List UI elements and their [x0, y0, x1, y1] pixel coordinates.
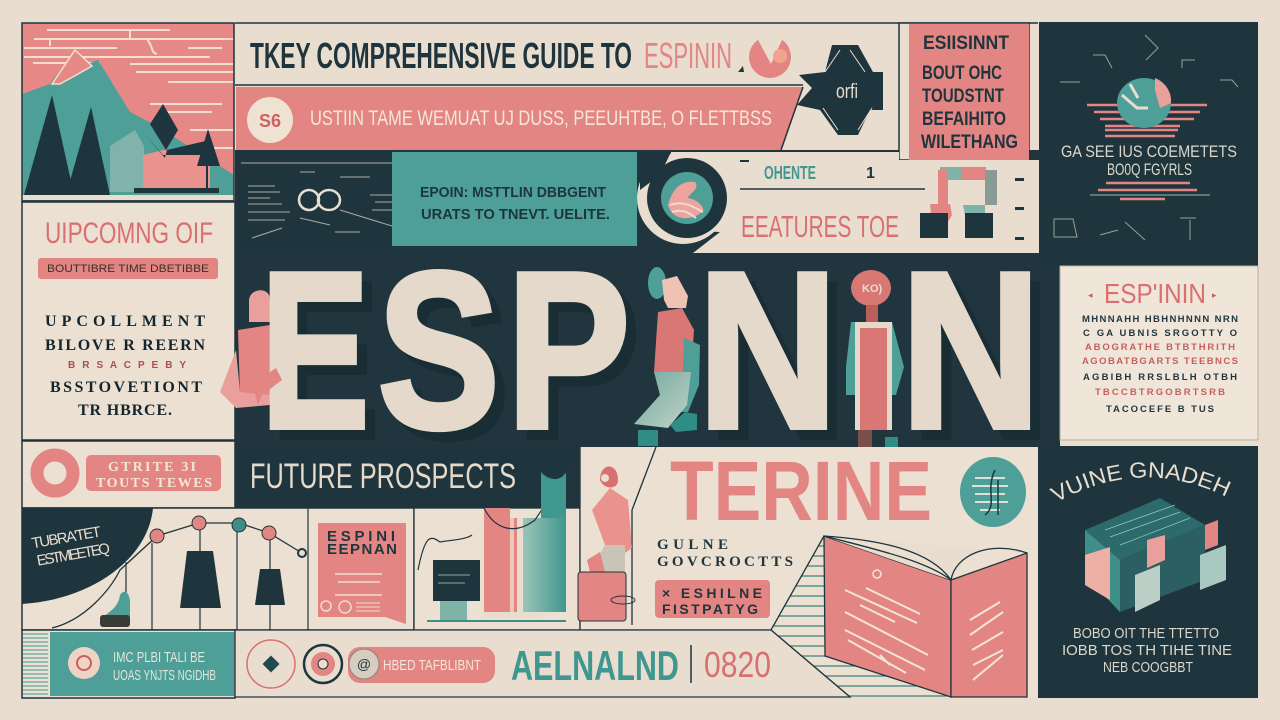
card: coral note: ESPINI [327, 528, 395, 545]
panel: right glossary: TACOCEFE B TUS [1106, 404, 1214, 415]
panel: teal footer note: IMC PLBI TALI BE [113, 649, 205, 666]
heading: giant ESPINNIN: P [507, 227, 630, 475]
panel: footer badges: AELNALND [511, 642, 679, 689]
figure: standing person [846, 270, 904, 448]
panel: circle badge note [22, 441, 235, 508]
panel: footer badges: @ [357, 656, 371, 672]
panel: subtitle ribbon [236, 87, 803, 150]
panel: upcoming: BILOVE R REERN [45, 337, 205, 354]
panel: subtitle ribbon: S6 [259, 111, 281, 131]
panel: coral note: TOUDSTNT [922, 86, 1004, 107]
figure: standing person: KO) [862, 283, 882, 295]
panel: timeline chart: ESTMEETEQ [36, 540, 111, 570]
heading: giant ESPINNIN: N [698, 227, 837, 475]
panel: circle badge note: GTRITE 3I [108, 460, 196, 475]
callout: coral tag [655, 580, 770, 618]
panel: features [637, 152, 1039, 253]
panel: right glossary: C GA UBNIS SRGOTTY O [1083, 328, 1237, 339]
panel: central dark banner [235, 150, 1060, 508]
panel: subtitle ribbon: USTIIN TAME WEMUAT UJ DUSS, PEEUHTBE, O FLETTBSS [310, 107, 772, 130]
panel: teal footer note [22, 630, 235, 698]
panel: coral note: BEFAIHITO [922, 109, 1006, 130]
panel: right glossary: ◂ [1088, 290, 1093, 300]
panel: features: EEATURES TOE [741, 209, 899, 244]
panel: coral note: BOUT OHC [922, 63, 1002, 84]
panel: right glossary [1060, 266, 1258, 440]
panel: upcoming: BSSTOVETIONT [50, 379, 202, 396]
heading: giant ESPINNIN: N [911, 237, 1050, 485]
panel: dark data cube: BOBO OIT THE TTETTO [1073, 625, 1219, 642]
panel: mountain landscape [22, 23, 234, 201]
panel: right glossary: AGOBATBGARTS TEEBNCS [1082, 356, 1238, 367]
panel: terine feature: GULNE [657, 537, 728, 553]
heading: future prospects: FUTURE PROSPECTS [250, 457, 516, 496]
panel: dark data cube [1038, 446, 1258, 698]
panel: upcoming: BOUTTIBRE TIME DBETIBBE [47, 263, 209, 275]
badge: dark hexagon: orfi [836, 81, 858, 103]
panel: dark data cube: IOBB TOS TH TIHE TINE [1062, 642, 1232, 659]
panel: teal caption: EPOIN: MSTTLIN DBBGENT [420, 184, 606, 201]
panel: terine feature [578, 444, 1038, 697]
panel: dark emblem: GA SEE IUS COEMETETS [1061, 142, 1237, 161]
card: coral note [318, 523, 406, 624]
panel: dark data cube: NEB COOGBBT [1103, 659, 1193, 676]
card: coral note: EEPNAN [327, 541, 397, 558]
panel: sketch strip [238, 151, 392, 248]
heading: giant ESPINNIN [261, 227, 1050, 485]
panel: features: 1 [866, 165, 875, 182]
heading: guide title: TKEY COMPREHENSIVE GUIDE TO [250, 35, 632, 76]
heading: giant ESPINNIN: N [901, 227, 1040, 475]
panel: dark emblem: BO0Q FGYRLS [1107, 160, 1192, 179]
figure: walking person [634, 267, 700, 446]
callout: coral tag: × ESHILNE [662, 585, 762, 601]
heading: giant ESPINNIN: E [261, 227, 369, 475]
panel: terine feature: TERINE [670, 444, 932, 538]
heading: guide title accent: ESPININ [644, 35, 732, 76]
panel: dark data cube: VUINE GNADEH [1049, 462, 1231, 500]
panel: footer badges [235, 630, 850, 697]
figure: sitting person hand [254, 368, 282, 405]
badge: dark hexagon [797, 45, 883, 135]
figure: sitting person body [220, 290, 270, 408]
heading: giant ESPINNIN: N [708, 237, 847, 485]
panel: features: OHENTE [764, 163, 816, 183]
panel: upcoming [22, 202, 235, 440]
panel: right glossary: ▸ [1212, 290, 1217, 300]
panel: teal caption: URATS TO TNEVT. UELITE. [421, 206, 610, 223]
panel frame: header [235, 23, 1038, 151]
panel: upcoming: B R S A C P E B Y [68, 360, 186, 371]
panel: upcoming: TR HBRCE. [78, 402, 172, 419]
heading: giant ESPINNIN: E [271, 237, 379, 485]
icon: open book [580, 536, 1027, 697]
panel: upcoming: UPCOLLMENT [45, 313, 205, 330]
panel: coral note: WILETHANG [921, 132, 1018, 153]
panel: teal footer note: UOAS YNJTS NGIDHB [113, 667, 216, 684]
heading: future prospects [235, 447, 575, 518]
panel: upcoming: UIPCOMNG OIF [45, 217, 213, 250]
callout: coral tag: FISTPATYG [662, 601, 758, 617]
panel: coral note [899, 23, 1029, 160]
heading: giant ESPINNIN: S [388, 237, 509, 485]
panel: dark emblem [1039, 22, 1258, 266]
panel: timeline chart: TUBRA'TET [30, 523, 102, 552]
heading: giant ESPINNIN: P [517, 237, 640, 485]
panel: circle badge note: TOUTS TEWES [96, 476, 212, 491]
panel: right glossary: AGBIBH RRSLBLH OTBH [1083, 372, 1237, 383]
icon: coral ball [738, 35, 791, 78]
panel: right glossary: MHNNAHH HBHNHNNN NRN [1082, 314, 1238, 325]
panel: bar illustration [414, 505, 580, 630]
panel: coral note: ESIISINNT [923, 33, 1009, 54]
panel: right glossary: ESP'ININ [1104, 278, 1206, 309]
panel: footer badges: HBED TAFBLIBNT [383, 657, 481, 674]
panel: footer badges: 0820 [704, 644, 771, 685]
panel: teal caption [392, 152, 637, 246]
heading: giant ESPINNIN: S [378, 227, 499, 475]
panel: timeline chart [22, 508, 414, 630]
panel: right glossary: TBCCBTRGOBRTSRB [1095, 387, 1225, 398]
panel: right glossary: ABOGRATHE BTBTHRITH [1085, 342, 1235, 353]
panel: terine feature: GOVCROCTTS [657, 554, 793, 570]
